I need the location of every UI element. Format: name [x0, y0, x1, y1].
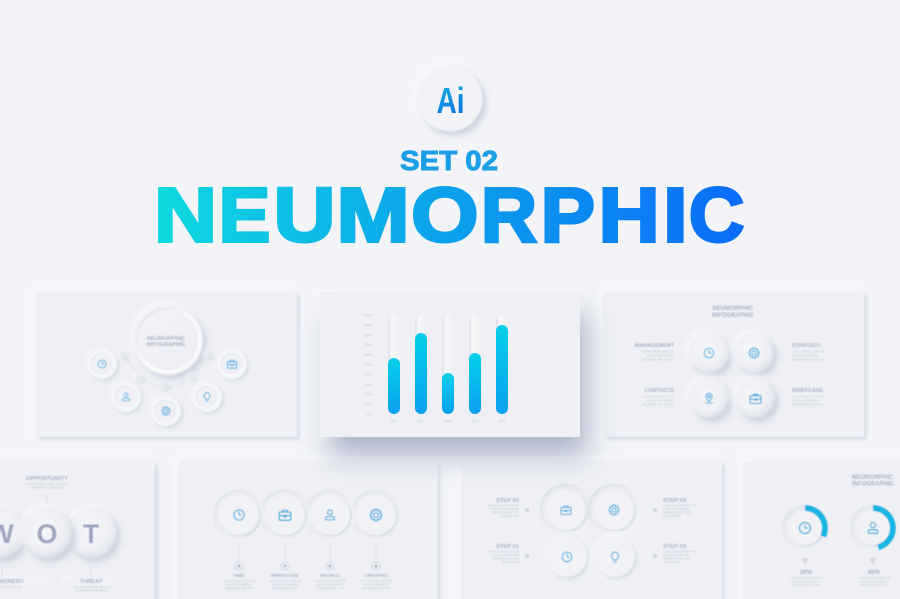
bar labels: 90%	[498, 420, 506, 424]
central ring	[133, 305, 203, 375]
central ring: NEUMORPHIC	[147, 336, 185, 342]
node: clock	[87, 349, 117, 379]
label: briefcase: amet, consectetur	[792, 398, 820, 402]
connector	[46, 495, 48, 503]
label: threat	[71, 579, 111, 592]
ring: time	[214, 490, 264, 540]
node: user	[111, 382, 141, 412]
axis labels: 90%	[365, 323, 373, 327]
label: opportunity: consectetur adipiscing	[30, 486, 64, 490]
label: time: TIME	[233, 573, 246, 579]
title: E	[219, 172, 270, 258]
title: P	[541, 172, 595, 258]
title: O	[411, 172, 479, 258]
label: briefcase: Lorem ipsum dolor sit	[269, 579, 301, 583]
connector dots	[120, 352, 212, 390]
label: people: adipiscing elit, sed	[316, 586, 344, 590]
marker centres	[238, 564, 378, 568]
panel: four spheres	[603, 292, 864, 437]
label: step 01: do eiusmod	[501, 560, 519, 564]
label: contacts: Lorem ipsum dolor sit	[642, 394, 674, 398]
label: time: Lorem ipsum dolor sit	[223, 579, 255, 583]
label: opportunity: Lorem ipsum dolor sit amet	[27, 482, 67, 486]
step ring: clock	[541, 531, 593, 583]
label: step 03: do eiusmod	[663, 514, 681, 518]
value: 45%: amet, consectetur	[861, 580, 888, 584]
label: strategy: STRATEGY	[792, 343, 821, 349]
panel: timeline	[178, 461, 438, 599]
title: C	[689, 172, 744, 258]
label: briefcase: adipiscing elit, sed	[271, 586, 299, 590]
timeline markers	[235, 562, 380, 570]
label: creative: CREATIVE	[364, 573, 389, 579]
label: strategy: amet, consectetur	[792, 354, 820, 358]
panel title: NEUMORPHIC	[712, 306, 754, 312]
label: people: Lorem ipsum dolor sit	[314, 579, 346, 583]
sphere: T: T	[83, 519, 100, 549]
label: strategy: adipiscing elit, sed do	[792, 358, 825, 362]
icon: Ai badge	[418, 66, 482, 132]
node: briefcase	[217, 349, 247, 379]
label: contacts	[642, 388, 675, 406]
label: briefcase: Lorem ipsum dolor sit	[792, 394, 824, 398]
connector arc	[124, 355, 208, 388]
bar labels	[390, 420, 506, 424]
axis labels: 30%	[365, 383, 373, 387]
label: contacts: amet, consectetur	[647, 398, 675, 402]
label: threat: THREAT	[79, 579, 103, 585]
label: step 04: amet, consectetur	[663, 553, 691, 557]
label: people: PEOPLE	[320, 573, 341, 579]
label: step 04: Lorem ipsum dolor sit	[663, 550, 695, 554]
panel title: NEUMORPHIC	[852, 475, 894, 481]
label: step 04: adipiscing elit, sed	[663, 556, 691, 560]
label: step 01: Lorem ipsum dolor sit	[487, 550, 519, 554]
value: 45%: Lorem ipsum dolor sit	[858, 576, 890, 580]
value: 30%: 30%	[800, 569, 813, 576]
label: threat: Lorem ipsum dolor sit amet	[71, 585, 111, 589]
label: step 03: Lorem ipsum dolor sit	[663, 504, 695, 508]
pointers	[801, 558, 877, 565]
bar labels: 55%	[390, 420, 398, 424]
label: step 04	[663, 544, 695, 564]
value: 45%: adipiscing elit, sed	[860, 583, 888, 587]
label: step 02: Lorem ipsum dolor sit	[487, 504, 519, 508]
ring: creative	[350, 490, 402, 540]
axis labels: 70%	[365, 343, 373, 347]
sphere: O: O	[36, 519, 58, 549]
label: management: amet, consectetur	[647, 354, 675, 358]
title: I	[663, 172, 688, 258]
step dots	[525, 508, 657, 558]
label: step 03	[663, 498, 695, 518]
bar labels: 40%	[444, 420, 452, 424]
node: gear	[151, 396, 181, 426]
axis labels	[363, 314, 373, 416]
label: step 04: STEP 04	[663, 544, 687, 550]
title: U	[274, 172, 335, 258]
label: threat: consectetur adipiscing	[74, 588, 108, 592]
progress ring: 30%	[782, 505, 828, 551]
sphere: clock	[689, 333, 729, 373]
label: opportunity	[26, 476, 68, 490]
panel title: INFOGRAPHIC	[712, 313, 755, 319]
panel title: INFOGRAPHIC	[852, 482, 895, 488]
label: contacts: CONTACTS	[644, 388, 674, 394]
panel: SWOT	[0, 461, 155, 599]
label: step 04: do eiusmod	[663, 560, 681, 564]
label: management: MANAGEMENT	[635, 343, 675, 349]
label: step 02: amet, consectetur	[492, 507, 520, 511]
sphere: briefcase	[735, 378, 775, 418]
node: bulb	[192, 382, 222, 412]
label: time: adipiscing elit, sed	[225, 586, 253, 590]
bar labels: 80%	[417, 420, 425, 424]
title: R	[481, 172, 537, 258]
label: step 01	[487, 544, 520, 564]
axis labels: 60%	[365, 353, 373, 357]
ring: people	[304, 490, 356, 540]
value: 45%	[858, 569, 890, 587]
step ring: gear	[588, 484, 640, 536]
central ring: INFOGRAPHIC	[146, 342, 186, 348]
watermark: www.25xt.com	[19, 573, 123, 590]
label: people: amet, consectetur	[317, 582, 344, 586]
label: management	[635, 343, 675, 362]
label: briefcase	[269, 573, 301, 590]
label: briefcase: amet, consectetur	[272, 582, 299, 586]
axis labels: 40%	[365, 373, 373, 377]
label: step 02	[487, 498, 520, 518]
panel: circular menu	[36, 292, 297, 437]
label: creative: Lorem ipsum dolor sit	[360, 579, 392, 583]
label: briefcase: BRIEFCASE	[271, 573, 300, 579]
label: people	[314, 573, 346, 590]
sphere: T	[67, 508, 117, 558]
sphere: gear	[734, 333, 774, 373]
label: contacts: adipiscing elit, sed do	[642, 402, 674, 406]
label: time: amet, consectetur	[226, 582, 253, 586]
sphere: O	[22, 508, 72, 558]
dashed connectors	[239, 544, 376, 560]
label: briefcase	[792, 388, 825, 406]
label: step 02: STEP 02	[496, 498, 519, 504]
label: step 01: amet, consectetur	[492, 553, 520, 557]
label: weakness: ipsum dolor sit	[0, 585, 22, 589]
title: H	[598, 172, 660, 258]
axis labels: 50%	[365, 363, 373, 367]
panel: bar chart	[320, 292, 580, 437]
label: step 01: STEP 01	[496, 544, 520, 550]
panel title	[712, 306, 755, 319]
label: management: Lorem ipsum dolor sit	[642, 350, 674, 354]
label: briefcase: BRIEFCASE	[792, 388, 824, 394]
panel title	[852, 475, 895, 488]
label: opportunity: OPPORTUNITY	[26, 476, 68, 482]
axis labels: 80%	[365, 333, 373, 337]
sphere: W	[0, 508, 25, 558]
label: management: adipiscing elit, sed do	[642, 358, 674, 362]
label: step 03: STEP 03	[663, 498, 687, 504]
label: step 03: adipiscing elit, sed	[663, 510, 691, 514]
label: creative	[360, 573, 392, 590]
axis labels: 10%	[365, 403, 373, 407]
label: time	[223, 573, 255, 590]
label: briefcase: adipiscing elit, sed do	[792, 402, 825, 406]
title: M	[336, 172, 410, 258]
axis labels: 100%	[363, 314, 373, 318]
value: 30%: adipiscing elit, sed	[792, 583, 820, 587]
value: 30%: Lorem ipsum dolor sit	[790, 576, 822, 580]
label: step 01: adipiscing elit, sed	[491, 556, 519, 560]
bar tracks	[388, 315, 508, 414]
panel: four steps	[461, 461, 722, 599]
step ring: bulb	[589, 531, 641, 583]
axis labels: 0%	[367, 412, 373, 416]
value: 45%: 45%	[868, 569, 881, 576]
label: creative: amet, consectetur	[363, 582, 390, 586]
progress ring: 45%	[850, 505, 896, 551]
bar values	[388, 325, 508, 414]
label: strategy	[792, 343, 825, 362]
bar labels: 60%	[471, 420, 479, 424]
sphere: pin	[689, 378, 729, 418]
label: strategy: Lorem ipsum dolor sit	[792, 350, 824, 354]
icon: Ai badge: Ai	[436, 80, 464, 121]
label: creative: adipiscing elit, sed	[362, 586, 390, 590]
label: step 02: do eiusmod	[501, 514, 519, 518]
label: step 02: adipiscing elit, sed	[491, 510, 519, 514]
title: N	[154, 172, 217, 258]
connectors	[2, 569, 91, 578]
label: step 03: amet, consectetur	[663, 507, 691, 511]
step ring: briefcase	[540, 484, 592, 536]
panel: progress rings	[743, 461, 900, 599]
subtitle: SET 02	[400, 145, 498, 176]
value: 30%: amet, consectetur	[793, 580, 820, 584]
ring: briefcase	[260, 490, 310, 540]
axis labels: 20%	[365, 393, 373, 397]
value: 30%	[790, 569, 822, 587]
label: weakness	[0, 579, 24, 589]
